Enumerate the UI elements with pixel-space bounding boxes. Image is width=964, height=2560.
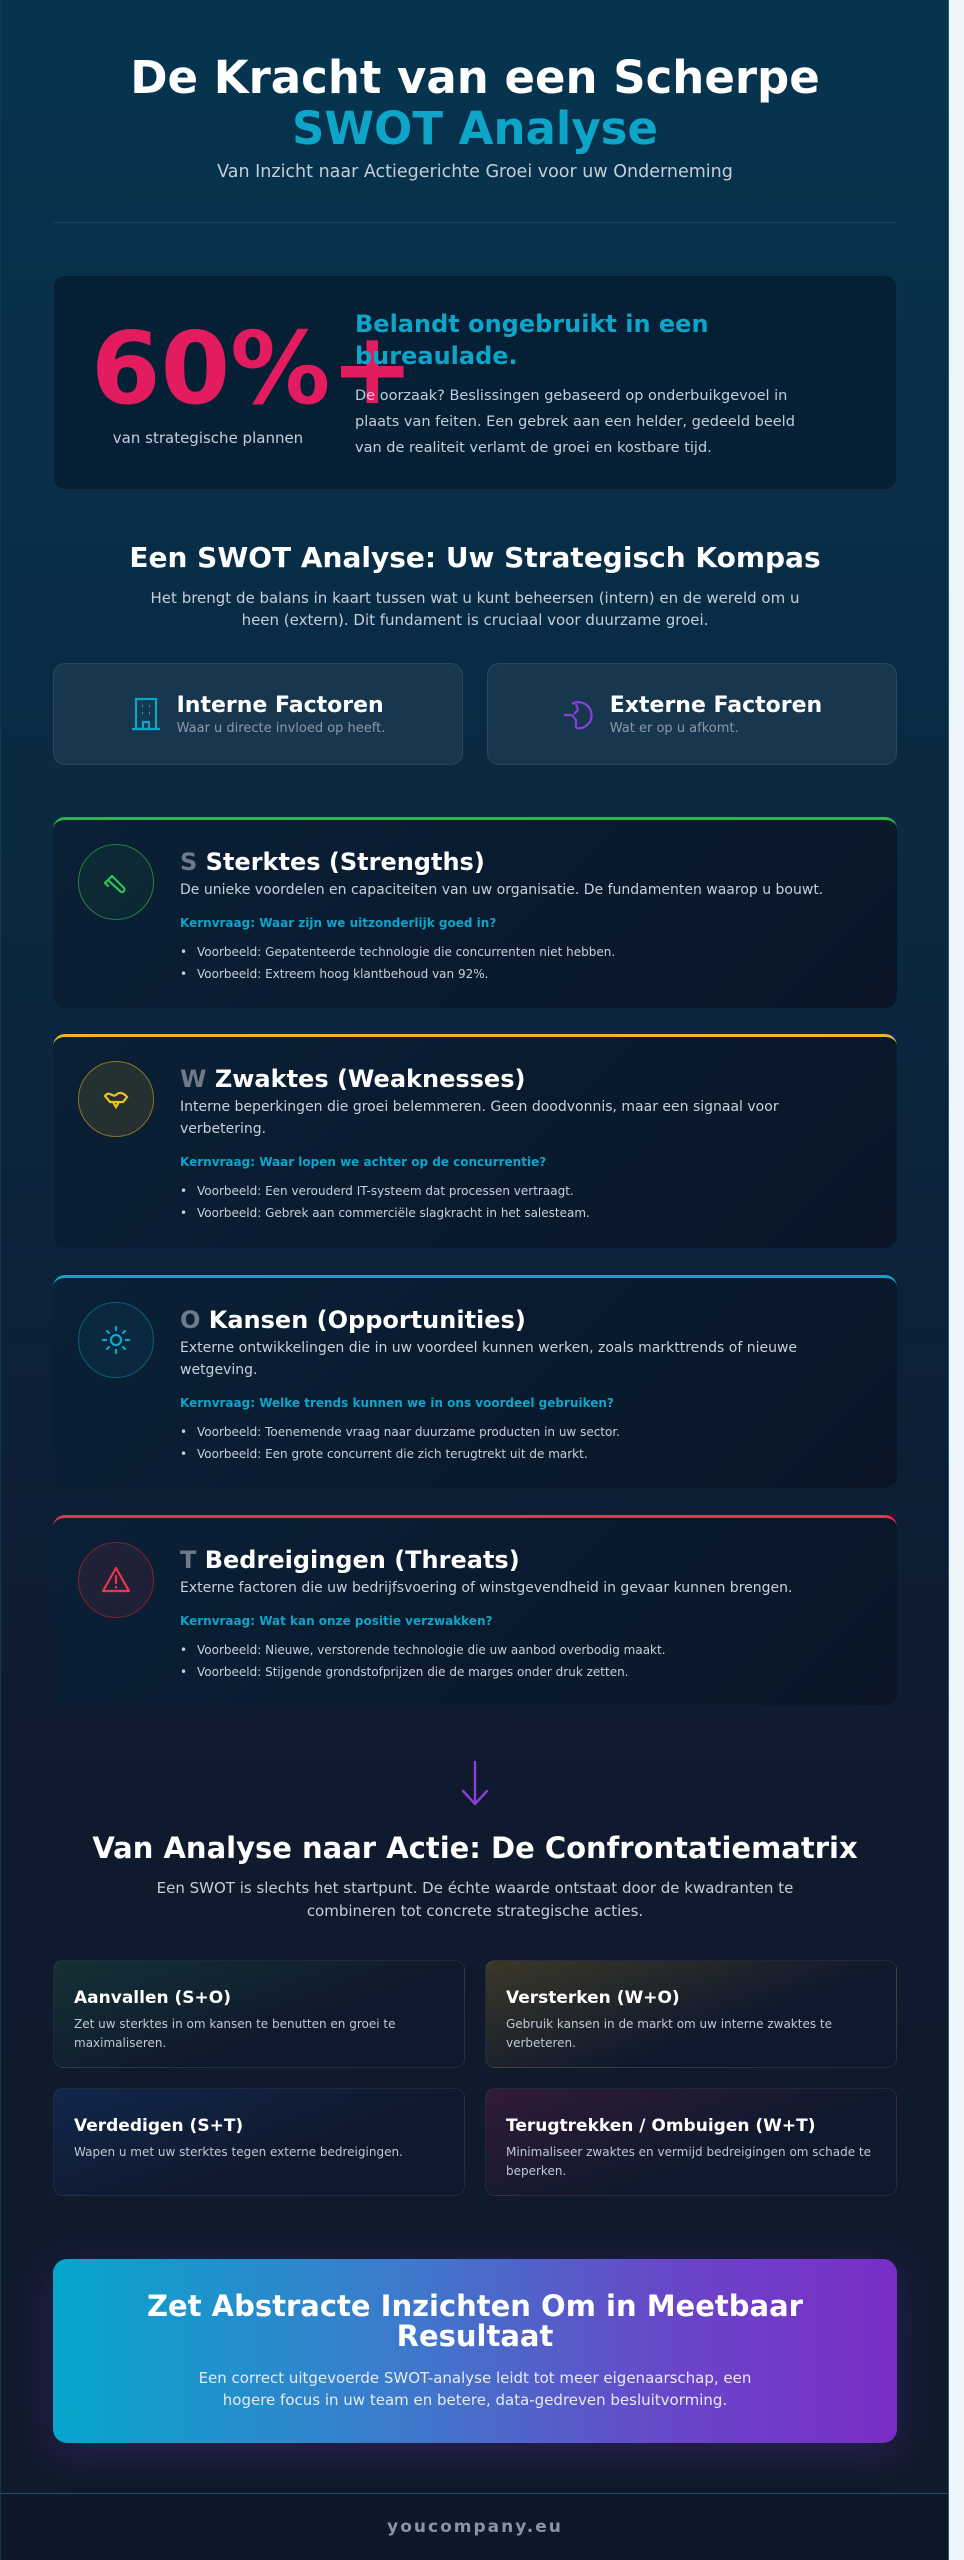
panel: interne factoren: Interne Factoren xyxy=(177,692,384,718)
icon: threat xyxy=(78,1542,154,1618)
stat explanation xyxy=(355,310,795,456)
text: zwaktes: Voorbeeld: Een verouderd IT-systeem dat processen vertraagt. xyxy=(197,1184,574,1198)
text: kansen: Kernvraag: Welke trends kunnen we in ons voordeel gebruiken? xyxy=(180,1396,614,1410)
text: sterktes xyxy=(180,848,823,980)
title: SWOT Analyse xyxy=(292,102,658,155)
subtitle: Van Inzicht naar Actiegerichte Groei voor uw Onderneming xyxy=(217,162,733,182)
text: zwaktes: W Zwaktes (Weaknesses) xyxy=(180,1065,525,1093)
text: zwaktes: Interne beperkingen die groei belemmeren. Geen doodvonnis, maar een signaal voor verbetering. xyxy=(180,1099,779,1137)
text: zwaktes: Voorbeeld: Gebrek aan commerciële slagkracht in het salesteam. xyxy=(197,1206,590,1220)
heading: confrontatiematrix: Van Analyse naar Actie: De Confrontatiematrix xyxy=(92,1831,858,1865)
text: bedreigingen xyxy=(180,1546,792,1678)
panel: stat xyxy=(53,275,897,490)
panel: externe factoren: Wat er op u afkomt. xyxy=(610,720,739,736)
matrix: aanvallen: Zet uw sterktes in om kansen te benutten en groei te maximaliseren. xyxy=(74,2017,395,2050)
stat number: van strategische plannen xyxy=(113,429,303,447)
text: zwaktes: Kernvraag: Waar lopen we achter op de concurrentie? xyxy=(180,1155,546,1169)
callout: CTA xyxy=(53,2259,897,2443)
icon: external xyxy=(564,701,593,730)
text: sterktes: De unieke voordelen en capaciteiten van uw organisatie. De fundamenten waarop u bouwt. xyxy=(180,882,823,898)
icon: building xyxy=(132,698,160,730)
icon: weakness xyxy=(78,1061,154,1137)
title: De Kracht van een Scherpe xyxy=(130,51,820,104)
text: bedreigingen: Kernvraag: Wat kan onze positie verzwakken? xyxy=(180,1614,492,1628)
stat number: 60%+ xyxy=(91,310,414,427)
text: bedreigingen: Voorbeeld: Nieuwe, verstorende technologie die uw aanbod overbodig maakt. xyxy=(197,1643,666,1657)
matrix: terugtrekken: Terugtrekken / Ombuigen (W+T) xyxy=(506,2116,816,2136)
icon: strength xyxy=(78,844,154,920)
matrix: terugtrekken: Minimaliseer zwaktes en vermijd bedreigingen om schade te beperken. xyxy=(506,2145,871,2178)
text: kansen xyxy=(180,1306,797,1460)
title xyxy=(130,51,820,155)
text: sterktes: Voorbeeld: Extreem hoog klantbehoud van 92%. xyxy=(197,966,488,980)
matrix: verdedigen: Verdedigen (S+T) xyxy=(74,2116,243,2136)
stat explanation: Belandt ongebruikt in een bureaulade. xyxy=(355,310,709,370)
panel: externe factoren xyxy=(487,663,897,765)
text: kansen: Externe ontwikkelingen die in uw voordeel kunnen werken, zoals markttrends of nieuwe wetgeving. xyxy=(180,1340,797,1378)
heading: strategisch kompas: Een SWOT Analyse: Uw Strategisch Kompas xyxy=(129,541,821,574)
panel: bedreigingen xyxy=(53,1515,897,1705)
matrix: aanvallen xyxy=(53,1960,465,2068)
matrix: versterken: Versterken (W+O) xyxy=(506,1988,680,2008)
matrix: verdedigen: Wapen u met uw sterktes tegen externe bedreigingen. xyxy=(74,2145,403,2159)
matrix: terugtrekken xyxy=(485,2088,897,2196)
stat explanation: De oorzaak? Beslissingen gebaseerd op onderbuikgevoel in plaats van feiten. Een gebrek aan een helder, gedeeld beeld van de realiteit verlamt de groei en kostbare tijd. xyxy=(355,388,795,456)
panel: externe factoren: Externe Factoren xyxy=(610,692,822,718)
text: sterktes: Voorbeeld: Gepatenteerde technologie die concurrenten niet hebben. xyxy=(197,945,615,959)
panel: interne factoren: Waar u directe invloed op heeft. xyxy=(177,720,385,736)
text: sterktes: Kernvraag: Waar zijn we uitzonderlijk goed in? xyxy=(180,916,496,930)
text: bedreigingen: T Bedreigingen (Threats) xyxy=(180,1546,520,1574)
intro text: Het brengt de balans in kaart tussen wat u kunt beheersen (intern) en de wereld om u heen (extern). Dit fundament is cruciaal voor duurzame groei. xyxy=(151,589,799,629)
panel: interne factoren xyxy=(53,663,463,765)
footer xyxy=(1,2493,949,2560)
matrix: versterken: Gebruik kansen in de markt om uw interne zwaktes te verbeteren. xyxy=(506,2017,832,2050)
matrix intro text: Een SWOT is slechts het startpunt. De échte waarde ontstaat door de kwadranten te combineren tot concrete strategische acties. xyxy=(157,1879,793,1920)
footer: youcompany.eu xyxy=(387,2517,563,2537)
matrix: versterken xyxy=(485,1960,897,2068)
matrix: aanvallen: Aanvallen (S+O) xyxy=(74,1988,231,2008)
text: bedreigingen: Externe factoren die uw bedrijfsvoering of winstgevendheid in gevaar kunnen brengen. xyxy=(180,1580,792,1596)
text: kansen: Voorbeeld: Een grote concurrent die zich terugtrekt uit de markt. xyxy=(197,1446,588,1460)
callout: CTA: Zet Abstracte Inzichten Om in Meetbaar Resultaat xyxy=(147,2289,803,2353)
text: sterktes: S Sterktes (Strengths) xyxy=(180,848,485,876)
arrow: down xyxy=(462,1760,488,1806)
panel: zwaktes xyxy=(53,1034,897,1248)
icon: opportunity xyxy=(78,1302,154,1378)
panel: kansen xyxy=(53,1275,897,1488)
text: kansen: O Kansen (Opportunities) xyxy=(180,1306,526,1334)
callout: CTA: Een correct uitgevoerde SWOT-analyse leidt tot meer eigenaarschap, een hogere focus in uw team en betere, data-gedreven besluitvorming. xyxy=(199,2369,751,2409)
matrix: verdedigen xyxy=(53,2088,465,2196)
text: kansen: Voorbeeld: Toenemende vraag naar duurzame producten in uw sector. xyxy=(197,1425,620,1439)
text: bedreigingen: Voorbeeld: Stijgende grondstofprijzen die de marges onder druk zetten. xyxy=(197,1664,628,1678)
panel: sterktes xyxy=(53,817,897,1008)
text: zwaktes xyxy=(180,1065,779,1220)
